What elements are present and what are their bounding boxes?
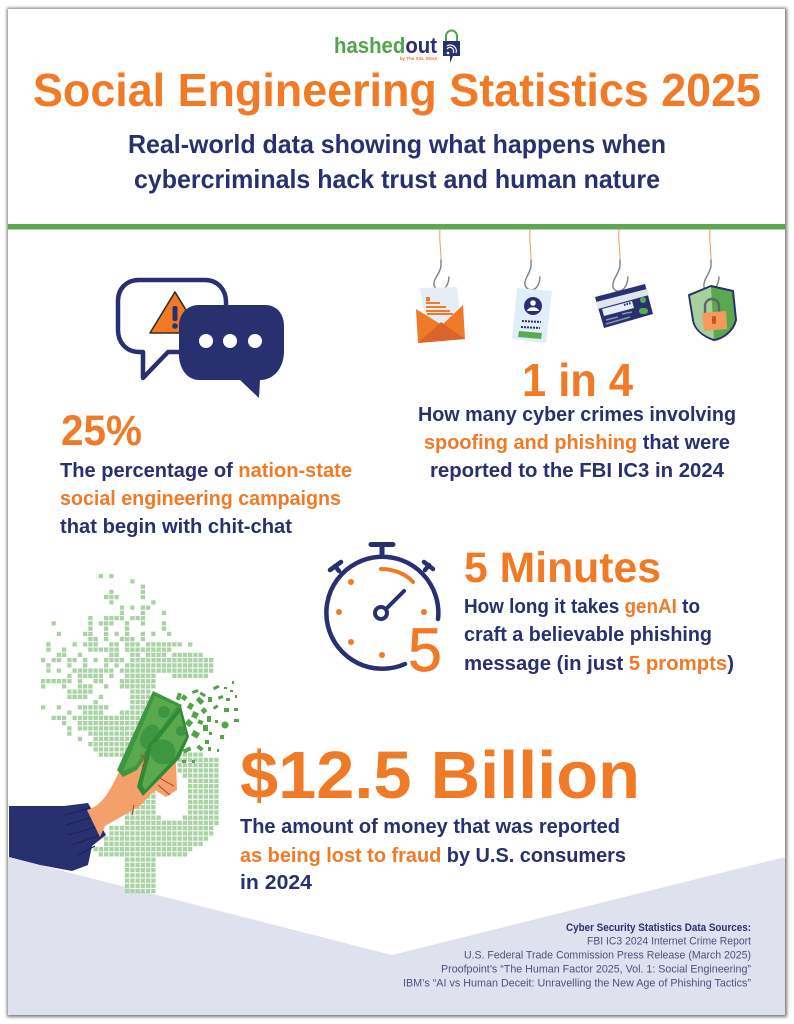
icon: stopwatch xyxy=(326,544,442,684)
subtitle: Real-world data showing what happens when xyxy=(128,129,666,159)
logo: hashedout: hashedout xyxy=(334,33,438,58)
stat: 1 in 4: How many cyber crimes involving xyxy=(418,404,736,426)
stat: 5 Minutes: 5 Minutes xyxy=(464,544,661,592)
stat: 5 Minutes: How long it takes genAI to xyxy=(464,596,700,618)
stat: 25%: 25% xyxy=(61,407,142,455)
footer background shape xyxy=(8,857,785,1015)
stat: 5 Minutes xyxy=(464,544,734,675)
icon: credit card xyxy=(595,284,653,328)
stat: $12.5 Billion: as being lost to fraud by U.S. consumers xyxy=(240,845,626,867)
stat: 25%: that begin with chit-chat xyxy=(60,516,292,538)
stat: $12.5 Billion: $12.5 Billion xyxy=(240,738,640,813)
subtitle xyxy=(128,129,666,194)
bills xyxy=(117,691,189,796)
logo: hashedout xyxy=(334,31,460,63)
logo: hashedout: by The SSL Store xyxy=(400,56,437,61)
pixel dollar sign xyxy=(41,576,219,891)
data sources xyxy=(403,922,751,990)
data sources: FBI IC3 2024 Internet Crime Report xyxy=(587,936,751,948)
stat: 1 in 4: 1 in 4 xyxy=(522,354,633,406)
icon: chat bubbles with warning xyxy=(118,280,284,398)
money particles xyxy=(176,681,239,763)
data sources: U.S. Federal Trade Commission Press Release (March 2025) xyxy=(464,950,751,962)
data sources: Cyber Security Statistics Data Sources: xyxy=(566,922,751,934)
stat: $12.5 Billion: The amount of money that was reported xyxy=(240,816,620,838)
stat: 1 in 4: reported to the FBI IC3 in 2024 xyxy=(430,460,725,482)
stat: 1 in 4 xyxy=(418,354,736,482)
hand xyxy=(87,752,177,837)
data sources: Proofpoint’s “The Human Factor 2025, Vol. 1: Social Engineering” xyxy=(441,964,751,976)
icon: shield with padlock xyxy=(689,286,736,340)
stat: 25% xyxy=(60,407,352,538)
hook lines xyxy=(434,229,719,291)
illustration: hand holding dissolving money xyxy=(9,681,239,871)
title: Social Engineering Statistics 2025 xyxy=(33,64,761,116)
finger lines xyxy=(132,755,174,815)
stat: 5 Minutes: message (in just 5 prompts) xyxy=(464,653,734,675)
green divider bar xyxy=(8,224,785,230)
stat: 25%: social engineering campaigns xyxy=(60,488,341,510)
icon: phishing hooks xyxy=(416,229,736,343)
sleeve xyxy=(9,803,106,871)
stat: $12.5 Billion xyxy=(240,738,640,894)
icon: login card xyxy=(512,288,552,343)
stat: 25%: The percentage of nation-state xyxy=(60,460,352,482)
subtitle: cybercriminals hack trust and human nature xyxy=(134,164,660,194)
stat: $12.5 Billion: in 2024 xyxy=(240,872,313,894)
stat: 5 Minutes: craft a believable phishing xyxy=(464,624,712,646)
data sources: IBM’s “AI vs Human Deceit: Unravelling the New Age of Phishing Tactics” xyxy=(403,978,751,990)
icon: stopwatch: 5 xyxy=(408,616,442,684)
icon: envelope xyxy=(416,287,465,343)
stat: 1 in 4: spoofing and phishing that were xyxy=(424,432,730,454)
